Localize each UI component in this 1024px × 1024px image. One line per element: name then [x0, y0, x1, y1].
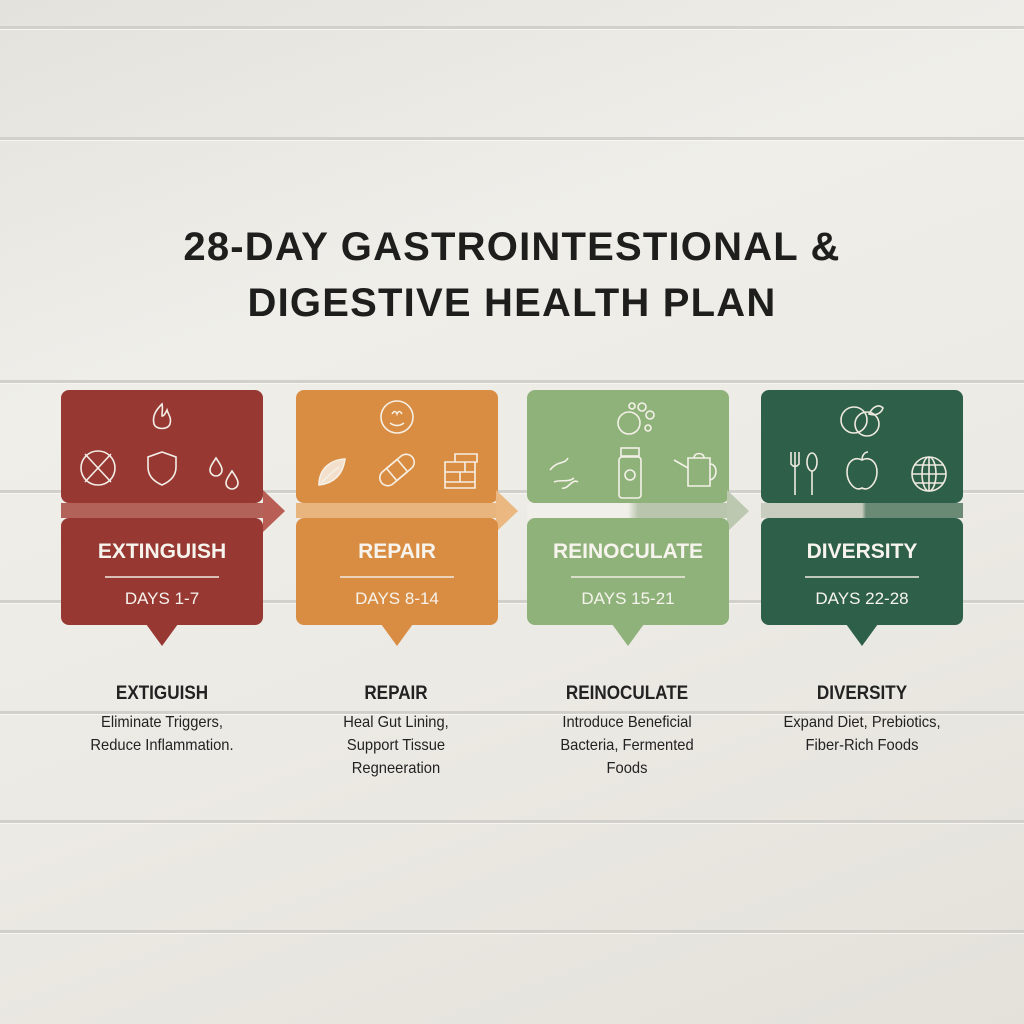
- icons: extinguish: [80, 402, 239, 490]
- text block: repair: Regneeration: [352, 760, 440, 777]
- panel: reinoculate: [527, 390, 749, 646]
- title: 28-DAY GASTROINTESTIONAL &: [183, 225, 841, 269]
- panel: repair: DAYS 8-14: [355, 589, 439, 608]
- panel: extinguish: EXTINGUISH: [98, 540, 226, 563]
- panel: reinoculate: REINOCULATE: [553, 540, 703, 563]
- panel: diversity: DIVERSITY: [807, 540, 917, 563]
- panel: extinguish: DAYS 1-7: [125, 589, 199, 608]
- text block: repair: Heal Gut Lining,: [343, 714, 449, 731]
- panel: extinguish: [61, 390, 285, 646]
- panel: diversity: DAYS 22-28: [815, 589, 909, 608]
- panel: reinoculate: DAYS 15-21: [581, 589, 675, 608]
- text block: reinoculate: Bacteria, Fermented: [560, 737, 694, 754]
- text block: repair: REPAIR: [364, 683, 428, 704]
- icons: repair: [318, 400, 478, 489]
- panel: diversity: [761, 390, 963, 646]
- text block: reinoculate: [560, 683, 694, 777]
- title: DIGESTIVE HEALTH PLAN: [248, 281, 776, 325]
- title: [183, 225, 841, 325]
- text block: diversity: Fiber-Rich Foods: [806, 737, 918, 754]
- text block: diversity: DIVERSITY: [817, 683, 907, 704]
- text block: repair: Support Tissue: [347, 737, 445, 754]
- icons: diversity: [790, 405, 947, 495]
- icons: reinoculate: [550, 402, 717, 499]
- text block: reinoculate: Foods: [607, 760, 647, 777]
- text block: extinguish: EXTIGUISH: [116, 683, 208, 704]
- text block: extinguish: Reduce Inflammation.: [90, 737, 234, 754]
- panel: repair: REPAIR: [358, 540, 436, 563]
- text block: extinguish: Eliminate Triggers,: [101, 714, 223, 731]
- text block: repair: [343, 683, 449, 777]
- text block: reinoculate: REINOCULATE: [566, 683, 688, 704]
- panel: repair: [296, 390, 518, 646]
- text block: reinoculate: Introduce Beneficial: [562, 714, 692, 731]
- text block: extinguish: [90, 683, 234, 754]
- text block: diversity: Expand Diet, Prebiotics,: [783, 714, 941, 731]
- text block: diversity: [783, 683, 941, 754]
